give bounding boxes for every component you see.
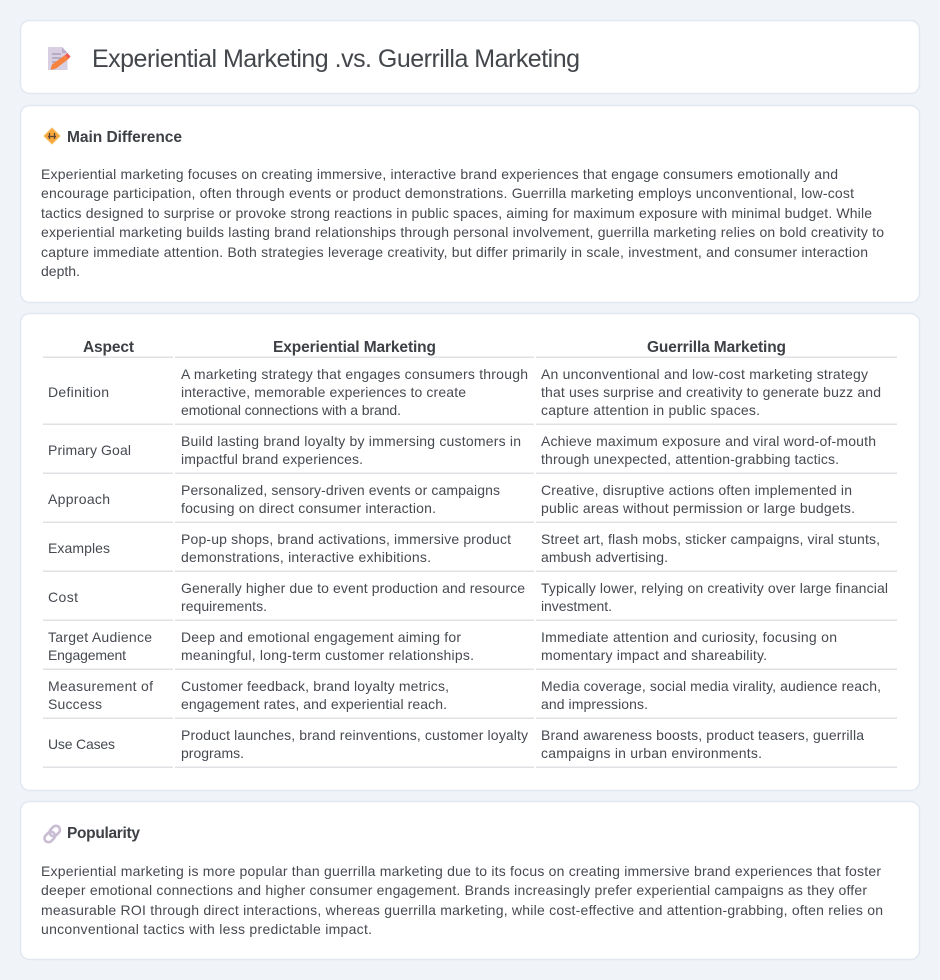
row: primary goal: Build lasting brand loyalty by immersing customers in xyxy=(181,433,521,449)
row: primary goal xyxy=(48,433,876,467)
row: measurement of success: Media coverage, social media virality, audience reach, xyxy=(541,678,881,694)
text block: popularity body xyxy=(41,863,883,937)
row: measurement of success: engagement rates, and experiential reach. xyxy=(181,696,447,712)
row: use cases: Use Cases xyxy=(48,736,115,752)
row: definition: that uses surprise and creativity to generate buzz and xyxy=(541,384,881,400)
row: approach: public areas without permission or large budgets. xyxy=(541,500,855,516)
table header: Experiential Marketing xyxy=(273,339,436,356)
row: approach: Personalized, sensory-driven events or campaigns xyxy=(181,482,500,498)
row: use cases: campaigns in urban environments. xyxy=(541,745,762,761)
table header xyxy=(83,339,786,356)
row: definition: interactive, memorable experiences to create xyxy=(181,384,466,400)
text block: popularity body: measurable ROI through direct interactions, whereas guerrilla marketing, while cost-effective and attention-grabbing, often relies on xyxy=(41,902,883,918)
row: examples xyxy=(48,531,880,565)
row: measurement of success: Success xyxy=(48,696,102,712)
row: cost: investment. xyxy=(541,598,612,614)
row: target audience engagement xyxy=(48,629,837,663)
row: approach: Approach xyxy=(48,491,110,507)
row: examples: Examples xyxy=(48,540,110,556)
panel: comparison table xyxy=(20,314,920,790)
text block: main difference body: Experiential marketing focuses on creating immersive, interactive brand experiences that engage consumers emotionally and xyxy=(41,166,838,182)
icon: warning diamond xyxy=(44,128,60,144)
row: target audience engagement: Immediate attention and curiosity, focusing on xyxy=(541,629,837,645)
text block: popularity body: Experiential marketing is more popular than guerrilla marketing due to its focus on creating immersive brand experiences that foster xyxy=(41,863,881,879)
row: examples: Pop-up shops, brand activations, immersive product xyxy=(181,531,511,547)
row: examples: Street art, flash mobs, sticker campaigns, viral stunts, xyxy=(541,531,880,547)
row: primary goal: Primary Goal xyxy=(48,442,131,458)
table header: Aspect xyxy=(83,339,134,356)
row: approach xyxy=(48,482,855,516)
row: measurement of success xyxy=(48,678,881,712)
row: measurement of success: Measurement of xyxy=(48,678,153,694)
row: use cases: Product launches, brand reinventions, customer loyalty xyxy=(181,727,528,743)
row: target audience engagement: meaningful, long-term customer relationships. xyxy=(181,647,474,663)
text block: main difference body: capture immediate attention. Both strategies leverage creativity, but differ primarily in scale, investment, and consumer interaction xyxy=(41,244,868,260)
row: definition: emotional connections with a brand. xyxy=(181,402,401,418)
row: examples: ambush advertising. xyxy=(541,549,668,565)
row: target audience engagement: momentary impact and shareability. xyxy=(541,647,767,663)
row: primary goal: Achieve maximum exposure and viral word-of-mouth xyxy=(541,433,876,449)
panel: popularity xyxy=(20,802,920,960)
row: cost: Cost xyxy=(48,589,78,605)
text block: main difference body: depth. xyxy=(41,263,80,279)
heading: main difference: Main Difference xyxy=(67,129,182,146)
row: use cases: programs. xyxy=(181,745,244,761)
row: measurement of success: and impressions. xyxy=(541,696,648,712)
text block: popularity body: deeper emotional connections and higher consumer engagement. Brands increasingly prefer experiential campaigns as they offer xyxy=(41,882,867,898)
icon: chain link xyxy=(43,824,62,844)
row: definition: capture attention in public spaces. xyxy=(541,402,760,418)
row: definition: A marketing strategy that engages consumers through xyxy=(181,366,528,382)
text block: popularity body: unconventional tactics with less predictable impact. xyxy=(41,921,372,937)
row: cost: Typically lower, relying on creativity over large financial xyxy=(541,580,888,596)
row: approach: Creative, disruptive actions often implemented in xyxy=(541,482,852,498)
row: target audience engagement: Target Audience xyxy=(48,629,152,645)
heading: page title: Experiential Marketing .vs. Guerrilla Marketing xyxy=(92,45,580,73)
heading: popularity: Popularity xyxy=(67,825,140,842)
row: use cases xyxy=(48,727,864,761)
row: use cases: Brand awareness boosts, product teasers, guerrilla xyxy=(541,727,864,743)
text block: main difference body: encourage participation, often through events or product demonstrations. Guerrilla marketing employs unconventional, low-cost xyxy=(41,185,854,201)
row: primary goal: through unexpected, attention-grabbing tactics. xyxy=(541,451,839,467)
icon: document with pencil xyxy=(48,47,70,70)
row: target audience engagement: Deep and emotional engagement aiming for xyxy=(181,629,461,645)
row: approach: focusing on direct consumer interaction. xyxy=(181,500,436,516)
panel: title xyxy=(20,20,920,94)
row: cost: requirements. xyxy=(181,598,267,614)
row: primary goal: impactful brand experiences. xyxy=(181,451,363,467)
row: measurement of success: Customer feedback, brand loyalty metrics, xyxy=(181,678,449,694)
row: target audience engagement: Engagement xyxy=(48,647,126,663)
row: definition xyxy=(48,366,881,418)
text block: main difference body xyxy=(41,166,884,279)
text block: main difference body: tactics designed to surprise or provoke strong reactions in public spaces, aiming for maximum exposure with minimal budget. While xyxy=(41,205,872,221)
row: examples: demonstrations, interactive exhibitions. xyxy=(181,549,431,565)
panel: main difference xyxy=(20,106,920,302)
row: definition: An unconventional and low-cost marketing strategy xyxy=(541,366,868,382)
row: definition: Definition xyxy=(48,384,109,400)
text block: main difference body: experiential marketing builds lasting brand relationships through personal involvement, guerrilla marketing relies on bold creativity to xyxy=(41,224,884,240)
row: cost: Generally higher due to event production and resource xyxy=(181,580,525,596)
table header: Guerrilla Marketing xyxy=(647,339,786,356)
row: cost xyxy=(48,580,888,614)
